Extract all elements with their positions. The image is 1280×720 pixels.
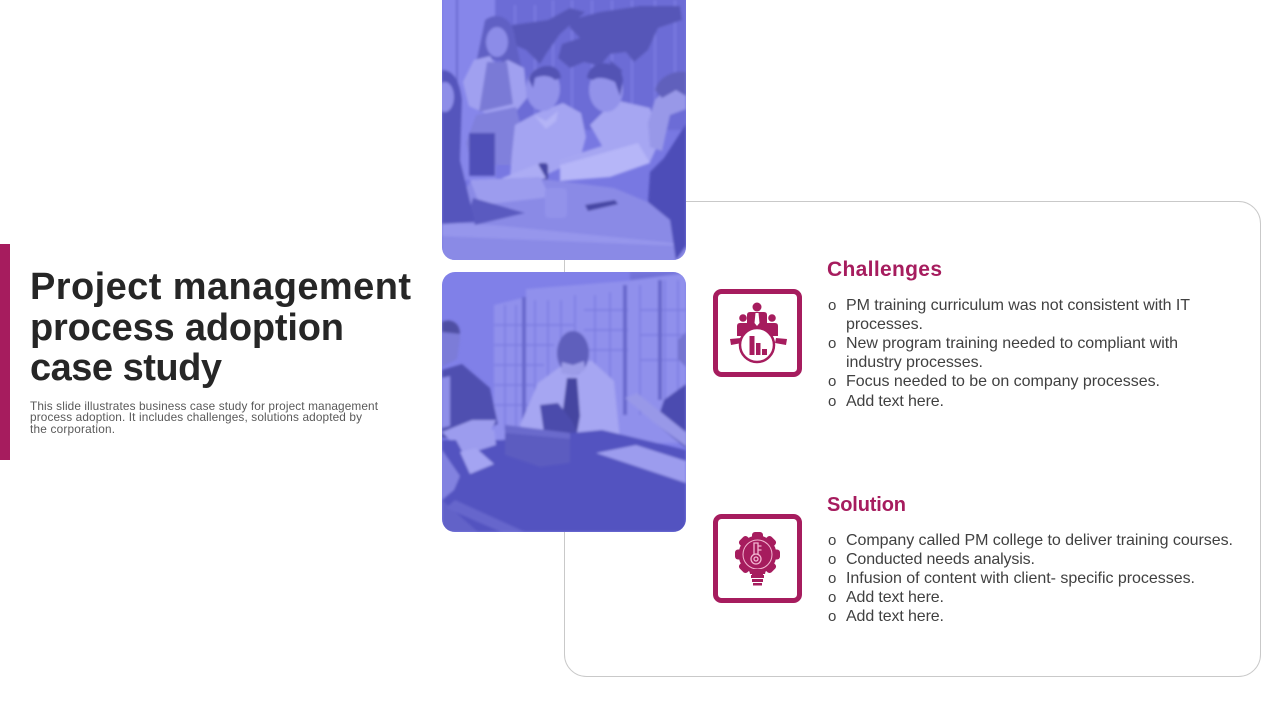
bullet list: solution: [828, 532, 1233, 625]
description text: the corporation.: [30, 422, 115, 436]
bullet list: challenges: o: [828, 297, 836, 314]
centre man: [520, 360, 620, 434]
photo: team around a laptop: [436, 0, 686, 278]
left man: [442, 364, 498, 438]
panel: content card: [564, 202, 1260, 676]
bullet list: challenges: PM training curriculum was not consistent with IT: [846, 297, 1190, 314]
bullet list: challenges: processes.: [846, 316, 923, 333]
box: [504, 432, 568, 465]
bullet list: solution: Add text here.: [846, 589, 944, 606]
accent bar: [0, 244, 10, 460]
bullet list: solution: Conducted needs analysis.: [846, 551, 1035, 568]
title: Project management: [30, 266, 411, 308]
title: case study: [30, 347, 222, 389]
bullet list: challenges: Focus needed to be on company processes.: [846, 373, 1160, 390]
bullet list: solution: Company called PM college to deliver training courses.: [846, 532, 1233, 549]
bullet list: solution: Infusion of content with client- specific processes.: [846, 570, 1195, 587]
description text: process adoption. It includes challenges, solutions adopted by: [30, 410, 362, 424]
bullet list: solution: Add text here.: [846, 608, 944, 625]
bullet list: challenges: industry processes.: [846, 354, 983, 371]
icon: team and chart: [716, 292, 800, 374]
bullet list: solution: o: [828, 551, 836, 568]
man two: [579, 100, 656, 162]
woman: [476, 16, 520, 66]
bullet list: solution: o: [828, 570, 836, 587]
heading: Challenges: Challenges: [827, 258, 942, 281]
photo: meeting at a table: [442, 272, 687, 532]
title: [30, 266, 411, 389]
bullet list: solution: o: [828, 532, 836, 549]
right woman: [660, 384, 686, 448]
table: [442, 430, 686, 532]
left woman: [442, 70, 462, 172]
right person: [648, 124, 686, 260]
bullet list: challenges: o: [828, 393, 836, 410]
bullet list: challenges: New program training needed to compliant with: [846, 335, 1178, 352]
description text: [30, 399, 379, 436]
bullet list: solution: o: [828, 608, 836, 625]
laptop: [442, 160, 475, 224]
icon: gear light bulb with key: [716, 516, 800, 600]
description text: This slide illustrates business case study for project management: [30, 399, 379, 413]
folding screens: [494, 273, 686, 443]
heading: Solution: Solution: [827, 494, 906, 516]
bullet list: challenges: [828, 297, 1190, 410]
bullet list: challenges: o: [828, 335, 836, 352]
papers: [456, 429, 496, 455]
bullet list: challenges: Add text here.: [846, 393, 944, 410]
bullet list: challenges: o: [828, 373, 836, 390]
bullet list: solution: o: [828, 589, 836, 606]
man one: [510, 103, 586, 179]
table: [442, 178, 686, 260]
title: process adoption: [30, 307, 344, 349]
